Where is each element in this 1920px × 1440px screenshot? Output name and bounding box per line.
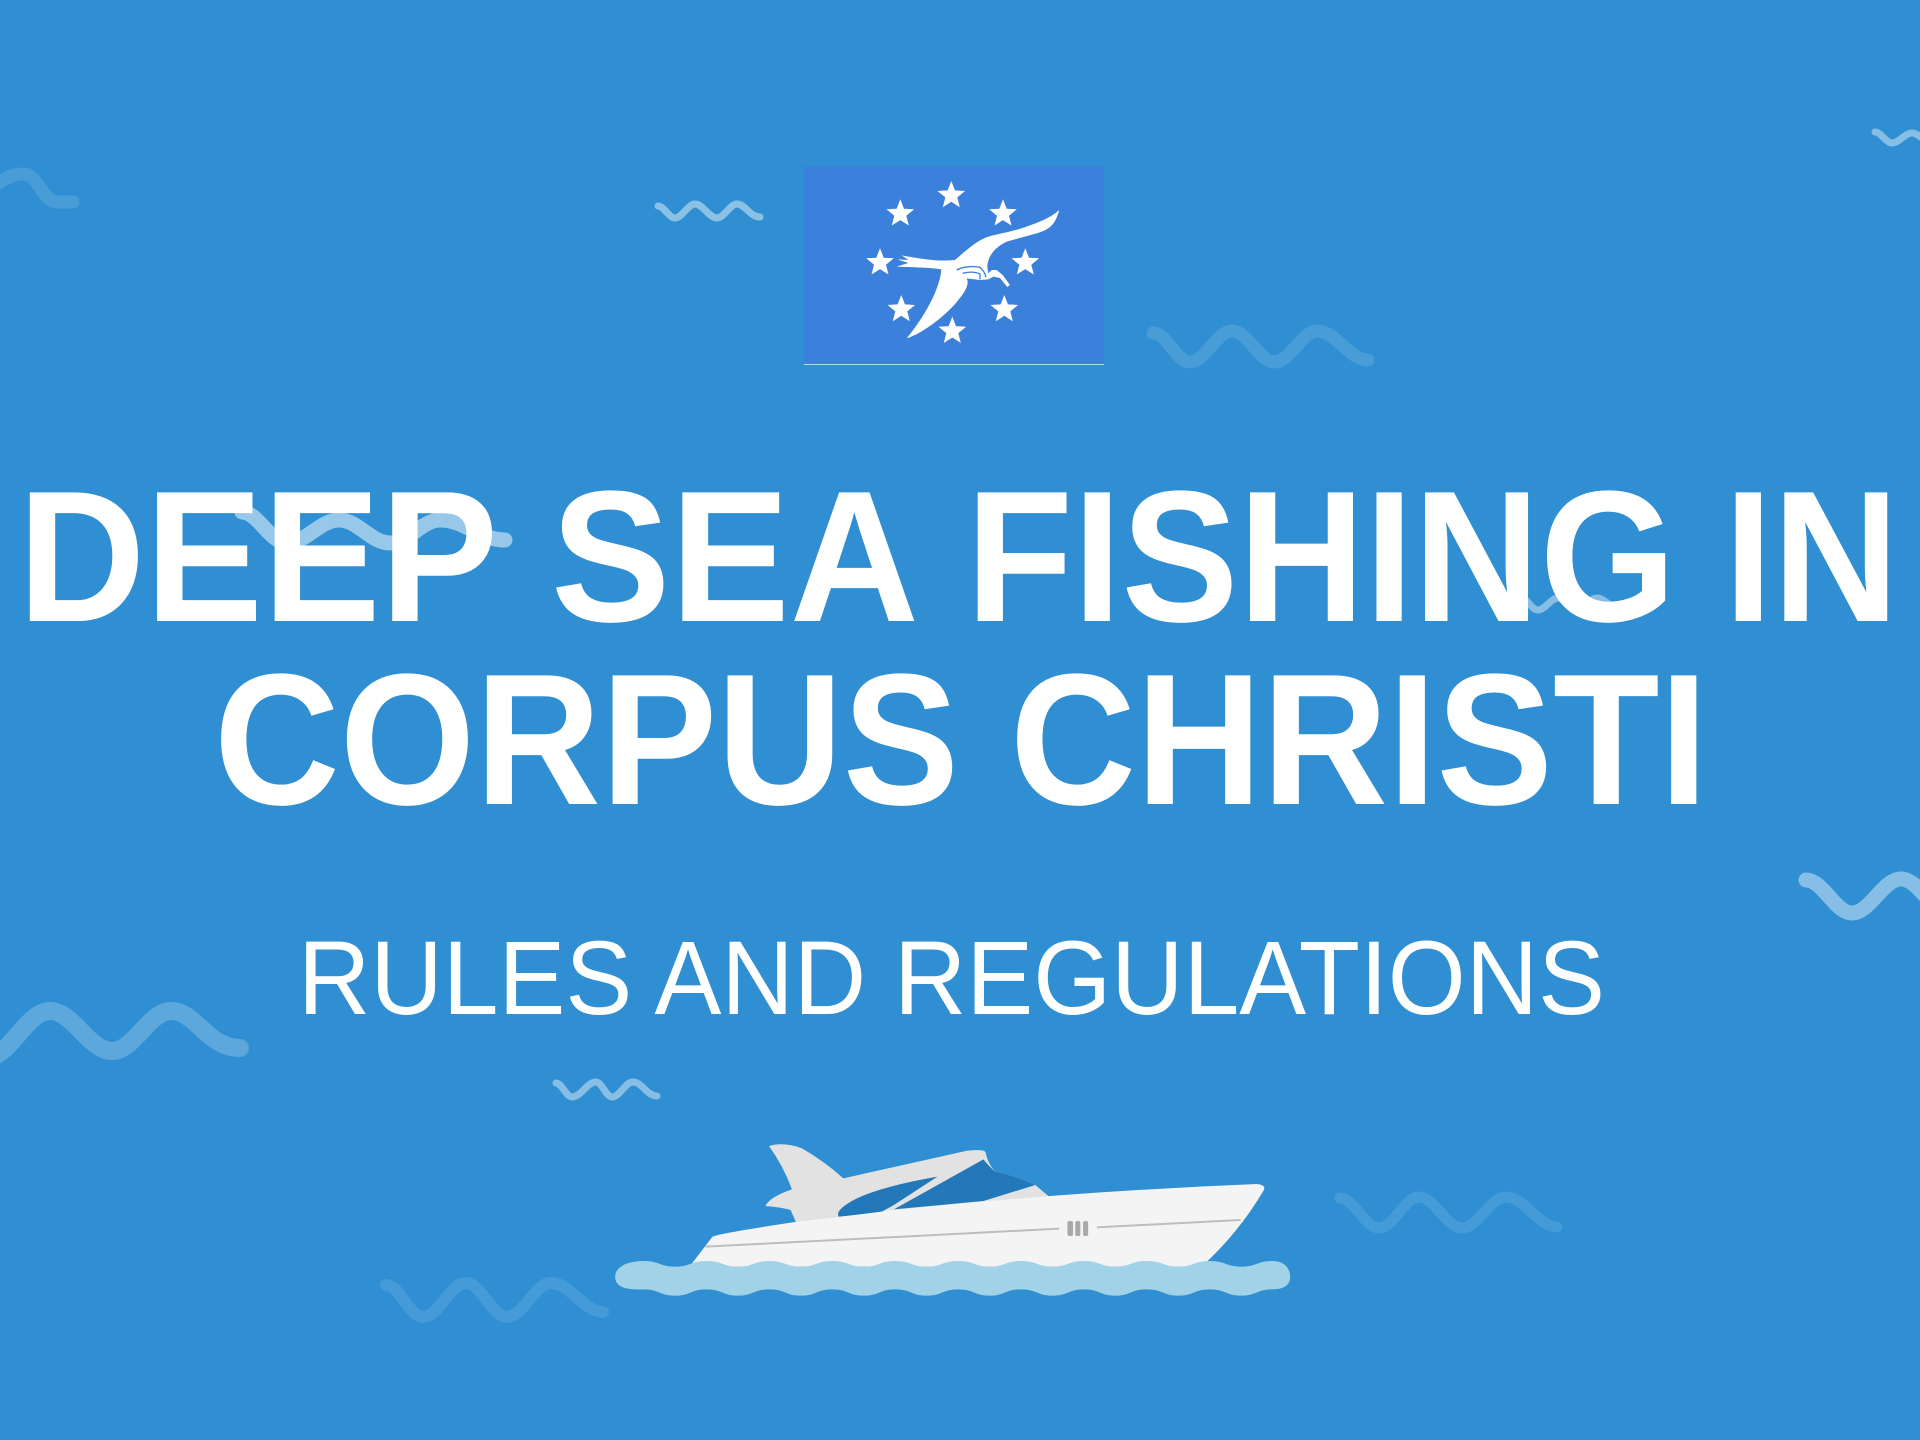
windshield bbox=[894, 1159, 1035, 1209]
wave: right of flag bbox=[1153, 331, 1368, 362]
water bbox=[615, 1261, 1290, 1296]
wave: behind title left bbox=[242, 512, 505, 543]
title bbox=[18, 452, 1899, 844]
wave: small top centre bbox=[658, 204, 760, 218]
boat superstructure bbox=[765, 1144, 1050, 1223]
side window bbox=[838, 1177, 938, 1217]
hull bbox=[690, 1184, 1264, 1267]
wave: right middle bbox=[1806, 879, 1920, 913]
icon: Corpus Christi flag bbox=[804, 166, 1104, 365]
wave: left large bbox=[0, 1011, 240, 1058]
wave: top left bbox=[0, 174, 73, 202]
title: FISHING bbox=[966, 452, 1676, 661]
wave: small lower left bbox=[556, 1082, 657, 1097]
icon: seagull bbox=[897, 210, 1059, 338]
hull vents bbox=[1067, 1221, 1088, 1236]
wave: top right bbox=[1875, 132, 1920, 143]
title: IN bbox=[1724, 452, 1899, 661]
wave: behind title right bbox=[1520, 597, 1620, 610]
title: SEA bbox=[551, 452, 919, 661]
title: CHRISTI bbox=[1010, 635, 1708, 844]
icon: boat on water bbox=[615, 1144, 1290, 1296]
subtitle: RULES AND REGULATIONS bbox=[298, 920, 1605, 1037]
wave: bottom left bbox=[386, 1283, 603, 1317]
wave: bottom right bbox=[1340, 1197, 1557, 1228]
title: CORPUS bbox=[214, 635, 959, 844]
hull stripe bbox=[706, 1220, 1241, 1247]
title: DEEP bbox=[18, 452, 498, 661]
